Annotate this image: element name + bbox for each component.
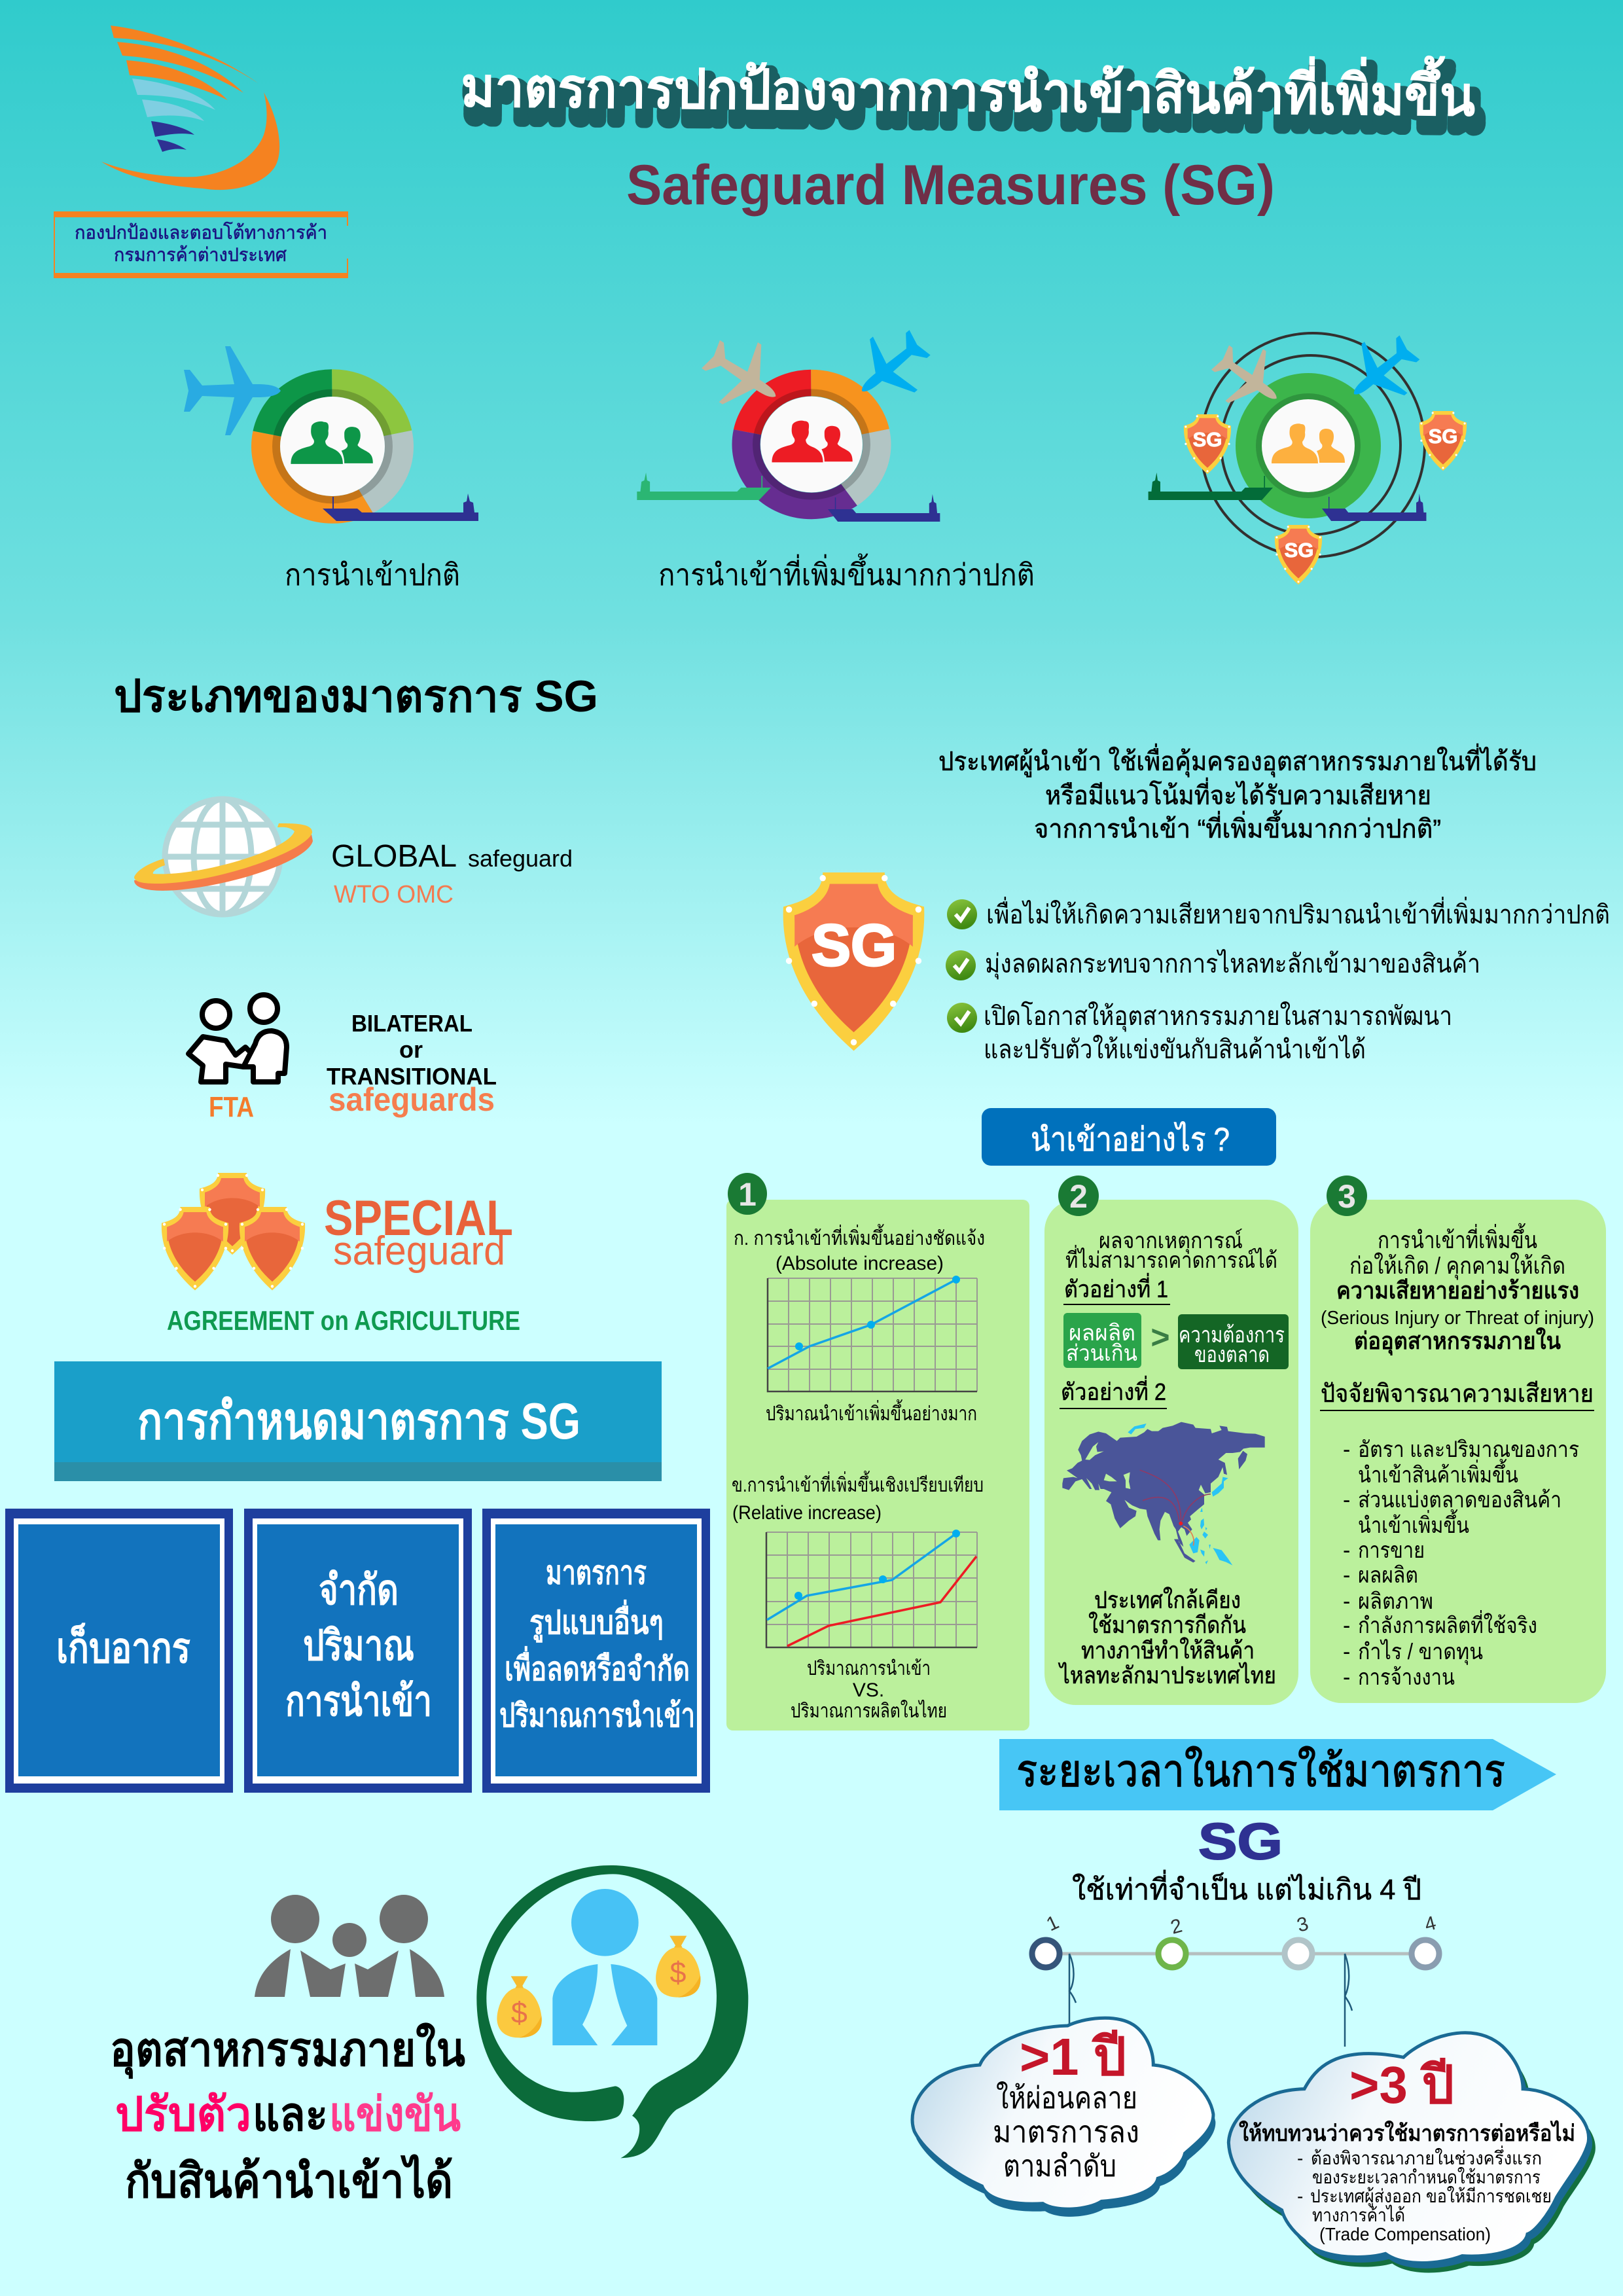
callout: cloud over 3 years: - — [1297, 2148, 1303, 2168]
panel: card 3 serious injury: นำเข้าเพิ่มขึ้น — [1358, 1509, 1469, 1538]
text: bilateral or transitional safeguards: safeguards — [329, 1081, 495, 1118]
text: agreement on agriculture: AGREEMENT on AGRICULTURE — [167, 1305, 520, 1336]
panel: card 1 increased imports: ข.การนำเข้าที่เพิ่มขึ้นเชิงเปรียบเทียบ — [732, 1471, 984, 1496]
panel: card 2 unforeseen events: ผลจากเหตุการณ์ — [1099, 1229, 1243, 1254]
text: global safeguard: safeguard — [468, 845, 573, 872]
text: bilateral or transitional safeguards — [327, 1010, 497, 1118]
panel: card 1 increased imports: ปริมาณนำเข้าเพิ่มขึ้นอย่างมาก — [766, 1399, 977, 1425]
panel: card 2 unforeseen events: 2 — [1069, 1178, 1088, 1215]
callout: cloud over 1 year: ตามลำดับ — [1003, 2149, 1116, 2183]
panel: card 3 serious injury: นำเข้าสินค้าเพิ่มขึ้น — [1358, 1459, 1518, 1488]
icon: three people — [255, 1895, 444, 1997]
logo: department emblem — [101, 26, 279, 190]
timeline: years 1 to 4: 2 — [1168, 1915, 1185, 1939]
panel: card 2 unforeseen events: ความต้องการ — [1179, 1323, 1285, 1348]
text: domestic industry adjusts and competes: อุตสาหกรรมภายใน — [110, 2022, 465, 2079]
icon: large SG shield: SG — [812, 913, 897, 978]
logo: department name plate: กรมการค้าต่างประเทศ — [114, 245, 287, 266]
icon: protected ring with SG shields — [1149, 322, 1467, 584]
text: bilateral or transitional safeguards: TRANSITIONAL — [327, 1063, 497, 1090]
text: bilateral or transitional safeguards: BILATERAL — [351, 1010, 473, 1037]
panel: card 3 serious injury — [1310, 1175, 1606, 1703]
list: objectives with check marks: มุ่งลดผลกระทบจากการไหลทะลักเข้ามาของสินค้า — [985, 949, 1480, 980]
panel: other measures: ปริมาณการนำเข้า — [499, 1697, 695, 1734]
panel: card 3 serious injury: (Serious Injury or Threat of injury) — [1321, 1308, 1594, 1329]
callout: cloud over 1 year — [912, 2018, 1215, 2217]
text: global safeguard: GLOBAL — [331, 839, 457, 874]
arrow banner: duration of measures — [999, 1739, 1556, 1810]
icon: speech bubble with business person and money bags: $ — [669, 1956, 687, 1989]
callout: cloud over 1 year: มาตรการลง — [993, 2115, 1139, 2149]
panel: other measures: มาตรการ — [546, 1554, 647, 1591]
panel: card 2 unforeseen events — [1044, 1175, 1298, 1705]
button: how imports: นำเข้าอย่างไร ? — [1031, 1121, 1230, 1158]
label: imports increased above normal: การนำเข้าที่เพิ่มขึ้นมากกว่าปกติ — [658, 553, 1035, 592]
callout: cloud over 3 years: (Trade Compensation) — [1319, 2224, 1491, 2244]
panel: card 3 serious injury: 3 — [1338, 1178, 1356, 1215]
list: objectives with check marks: เปิดโอกาสให้อุตสาหกรรมภายในสามารถพัฒนา — [984, 1001, 1452, 1032]
panel: card 3 serious injury: - — [1343, 1640, 1350, 1664]
panel: card 3 serious injury: ก่อให้เกิด / คุกคามให้เกิด — [1349, 1252, 1565, 1280]
panel: card 1 increased imports: (Relative increase) — [732, 1502, 882, 1524]
text: importing-country purpose: หรือมีแนวโน้มที่จะได้รับความเสียหาย — [1045, 778, 1431, 810]
title: มาตรการปกป้องจากการนำเข้าสินค้าที่เพิ่มขึ้น — [461, 48, 1476, 127]
callout: cloud over 3 years: ประเทศผู้ส่งออก ขอให้มีการชดเชย — [1310, 2185, 1552, 2208]
title: มาตรการปกป้องจากการนำเข้าสินค้าที่เพิ่มขึ้น — [466, 61, 1481, 140]
icon: global safeguard globe — [134, 799, 313, 914]
panel: card 3 serious injury: กำลังการผลิตที่ใช้จริง — [1358, 1610, 1537, 1638]
icon: normal imports ring — [184, 346, 478, 521]
panel: card 3 serious injury: ต่ออุตสาหกรรมภายใน — [1354, 1327, 1561, 1356]
text: domestic industry adjusts and competes: ปรับตัว — [115, 2089, 251, 2141]
panel: card 3 serious injury: ความเสียหายอย่างร้ายแรง — [1336, 1277, 1579, 1304]
timeline: years 1 to 4: 4 — [1422, 1912, 1438, 1936]
text: domestic industry adjusts and competes: และ — [253, 2089, 328, 2141]
label: normal imports: การนำเข้าปกติ — [285, 558, 460, 592]
panel: card 1 increased imports: (Absolute increase) — [776, 1253, 944, 1274]
panel: card 2 unforeseen events: ทางภาษีทำให้สินค้า — [1081, 1637, 1255, 1664]
panel: card 2 unforeseen events: ของตลาด — [1194, 1342, 1270, 1367]
icon: protected ring with SG shields: SG — [1429, 425, 1457, 448]
icon: increased imports ring — [637, 316, 942, 522]
icon: speech bubble with business person and money bags: $ — [511, 1996, 527, 2030]
panel: card 2 unforeseen events: > — [1150, 1319, 1170, 1355]
text: importing-country purpose: ประเทศผู้นำเข้า ใช้เพื่อคุ้มครองอุตสาหกรรมภายในที่ได้รับ — [938, 744, 1537, 778]
text: domestic industry adjusts and competes: กับสินค้านำเข้าได้ — [125, 2153, 453, 2208]
text: special safeguard: SPECIAL — [324, 1191, 513, 1246]
panel: import quantity limit: การนำเข้า — [285, 1677, 432, 1725]
callout: cloud over 3 years: >3 ปี — [1349, 2056, 1454, 2114]
text: domestic industry adjusts and competes — [110, 2022, 465, 2208]
panel: collect duties — [5, 1509, 233, 1793]
callout: cloud over 1 year: >1 ปี — [1020, 2028, 1126, 2086]
banner: setting SG measures: การกำหนดมาตรการ SG — [137, 1392, 580, 1450]
logo: department name plate — [54, 211, 348, 278]
callout: cloud over 3 years: ทางการค้าได้ — [1312, 2205, 1405, 2225]
panel: import quantity limit — [244, 1509, 472, 1793]
panel: other measures: เพื่อลดหรือจำกัด — [505, 1646, 690, 1687]
arrow banner: duration of measures: ระยะเวลาในการใช้มาตรการ — [1016, 1746, 1505, 1796]
text: bilateral or transitional safeguards: or — [399, 1036, 423, 1063]
panel: card 2 unforeseen events: ที่ไม่สามารถคาดการณ์ได้ — [1065, 1245, 1277, 1273]
panel: card 3 serious injury: - — [1343, 1437, 1350, 1462]
text: SG: SG — [1198, 1812, 1283, 1870]
panel: card 3 serious injury: - — [1343, 1589, 1350, 1614]
panel: card 2 unforeseen events: ส่วนเกิน — [1066, 1341, 1137, 1366]
logo: department name plate: กองปกป้องและตอบโต้ทางการค้า — [75, 221, 327, 243]
panel: card 3 serious injury: อัตรา และปริมาณของการ — [1358, 1437, 1579, 1462]
panel: card 3 serious injury: กำไร / ขาดทุน — [1358, 1639, 1483, 1665]
callout: cloud over 1 year: ให้ผ่อนคลาย — [996, 2081, 1137, 2115]
panel: card 1 increased imports: ปริมาณการนำเข้า — [807, 1658, 931, 1679]
panel: card 2 unforeseen events: ไหลทะลักมาประเทศไทย — [1058, 1662, 1276, 1689]
list: objectives with check marks: และปรับตัวให้แข่งขันกับสินค้านำเข้าได้ — [984, 1034, 1366, 1064]
panel: import quantity limit: ปริมาณ — [303, 1622, 414, 1669]
text: importing-country purpose: จากการนำเข้า “ที่เพิ่มขึ้นมากกว่าปกติ” — [1034, 810, 1441, 844]
panel: card 3 serious injury: - — [1343, 1665, 1350, 1690]
panel: card 3 serious injury: ส่วนแบ่งตลาดของสินค้า — [1358, 1488, 1561, 1513]
panel: import quantity limit: จำกัด — [319, 1566, 399, 1613]
panel: other measures: รูปแบบอื่นๆ — [529, 1600, 664, 1643]
panel: collect duties: เก็บอากร — [56, 1623, 190, 1672]
panel: card 2 unforeseen events: ประเทศใกล้เคียง — [1094, 1587, 1241, 1613]
panel: card 3 serious injury: - — [1343, 1613, 1350, 1638]
timeline: years 1 to 4: 3 — [1294, 1913, 1311, 1937]
panel: card 2 unforeseen events: ตัวอย่างที่ 2 — [1061, 1376, 1166, 1405]
panel: card 3 serious injury: ผลิตภาพ — [1358, 1589, 1433, 1614]
icon: large SG shield — [783, 872, 924, 1051]
panel: card 3 serious injury: การขาย — [1358, 1538, 1425, 1563]
text: domestic industry adjusts and competes: แข่งขัน — [329, 2089, 461, 2141]
panel: card 3 serious injury: การนำเข้าที่เพิ่มขึ้น — [1378, 1223, 1537, 1253]
callout: cloud over 3 years: ให้ทบทวนว่าควรใช้มาตรการต่อหรือไม่ — [1239, 2120, 1575, 2146]
callout: cloud over 3 years: ต้องพิจารณาภายในช่วงครึ่งแรก — [1311, 2145, 1542, 2168]
panel: card 3 serious injury: ผลผลิต — [1358, 1563, 1418, 1588]
text: global safeguard — [331, 839, 573, 908]
timeline: years 1 to 4 — [1032, 1911, 1439, 2047]
timeline: years 1 to 4: 1 — [1043, 1911, 1062, 1935]
panel: card 1 increased imports — [726, 1173, 1029, 1731]
panel: card 1 increased imports: 1 — [738, 1176, 757, 1213]
text: special safeguard — [324, 1191, 513, 1274]
text: importing-country purpose — [938, 744, 1537, 844]
icon: speech bubble with business person and money bags — [476, 1865, 748, 2158]
icon: protected ring with SG shields: SG — [1285, 539, 1313, 562]
heading: types of SG measures: ประเภทของมาตรการ SG — [114, 672, 598, 721]
icon: FTA handshake — [188, 995, 287, 1123]
icon: FTA handshake: FTA — [209, 1091, 254, 1123]
panel: card 2 unforeseen events: ผลผลิต — [1069, 1321, 1135, 1346]
list: objectives with check marks — [946, 897, 1610, 1064]
callout: cloud over 3 years — [1228, 2033, 1596, 2272]
panel: card 3 serious injury: - — [1343, 1488, 1350, 1513]
icon: protected ring with SG shields: SG — [1193, 428, 1222, 451]
callout: cloud over 3 years: - — [1297, 2186, 1303, 2206]
text: global safeguard: WTO OMC — [334, 881, 454, 908]
panel: card 3 serious injury: ปัจจัยพิจารณาความเสียหาย — [1321, 1380, 1594, 1408]
banner: setting SG measures — [54, 1361, 662, 1481]
panel: card 1 increased imports: VS. — [853, 1679, 884, 1701]
icon: three shields — [162, 1173, 305, 1291]
panel: card 3 serious injury: - — [1343, 1538, 1350, 1563]
panel: card 3 serious injury: การจ้างงาน — [1358, 1665, 1455, 1690]
button: how imports — [982, 1108, 1276, 1166]
panel: card 2 unforeseen events: ตัวอย่างที่ 1 — [1064, 1273, 1168, 1302]
panel: card 2 unforeseen events: ใช้มาตรการกีดกัน — [1088, 1611, 1246, 1638]
panel: card 1 increased imports: ปริมาณการผลิตในไทย — [791, 1699, 947, 1722]
subtitle: Safeguard Measures (SG) — [626, 154, 1275, 217]
panel: card 3 serious injury: - — [1343, 1563, 1350, 1588]
title: มาตรการปกป้องจากการนำเข้าสินค้าที่เพิ่มขึ้น — [466, 57, 1481, 136]
text: special safeguard: safeguard — [333, 1229, 505, 1274]
panel: other measures — [482, 1509, 710, 1793]
callout: cloud over 3 years: ของระยะเวลากำหนดใช้มาตรการ — [1312, 2166, 1541, 2187]
text: use as necessary, not over 4 years: ใช้เท่าที่จำเป็น แต่ไม่เกิน 4 ปี — [1072, 1869, 1421, 1906]
panel: card 1 increased imports: ก. การนำเข้าที่เพิ่มขึ้นอย่างชัดแจ้ง — [734, 1224, 985, 1249]
